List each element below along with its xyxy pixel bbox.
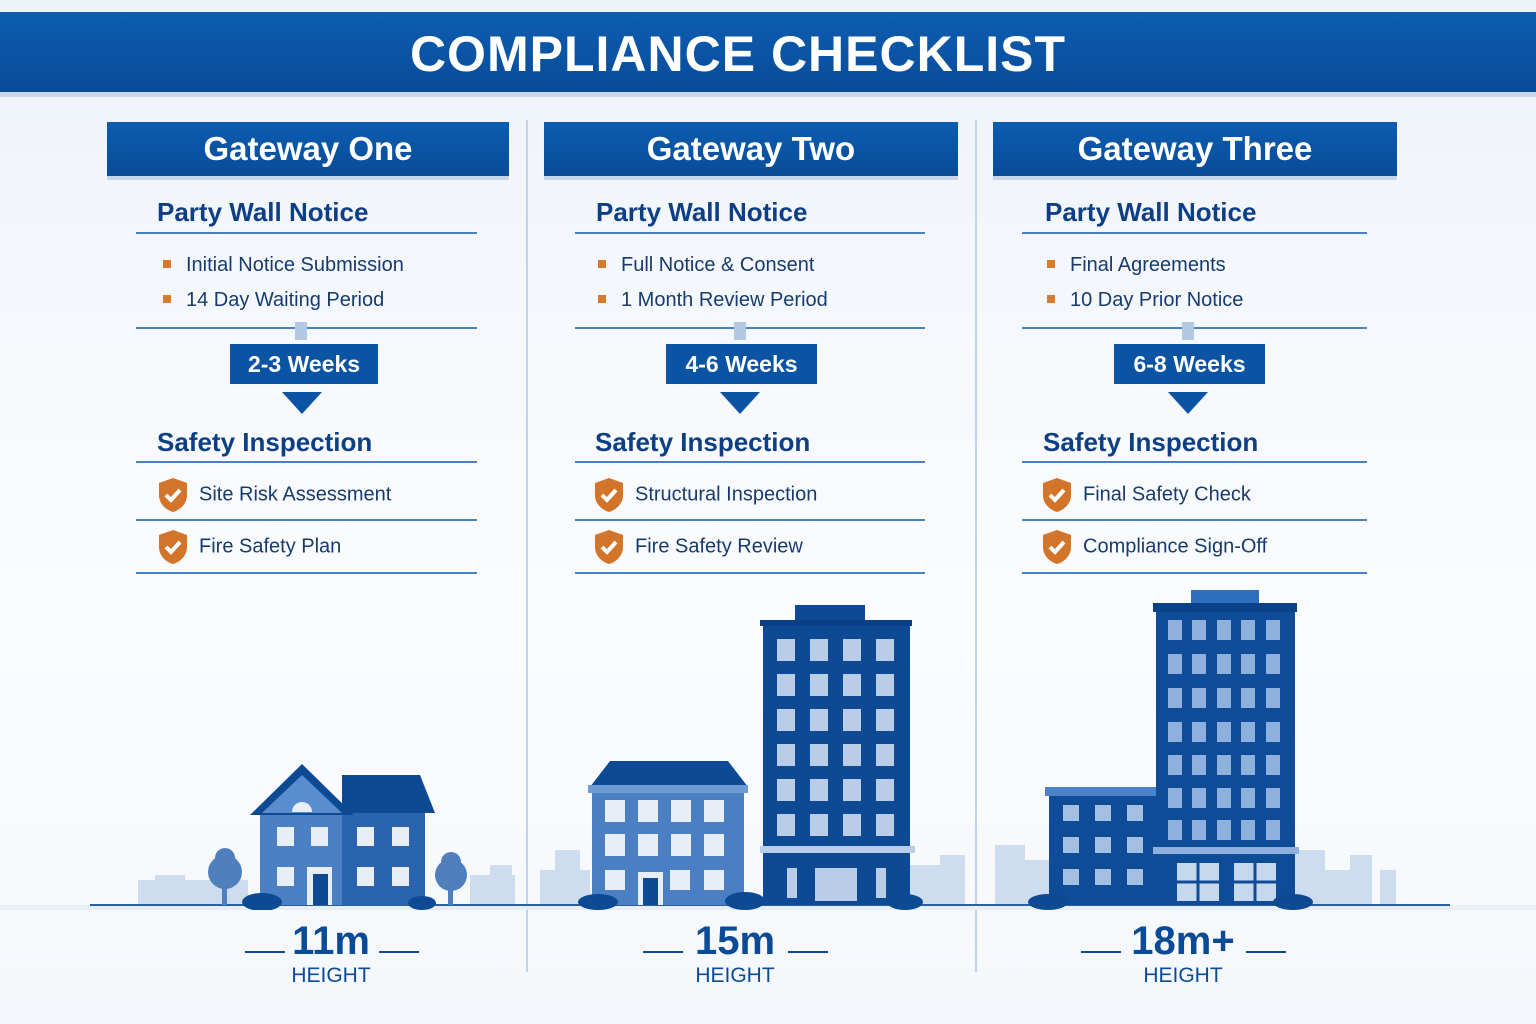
check items: Structural Inspection — [635, 483, 817, 505]
bullet list: Final Agreements — [1070, 254, 1226, 276]
label: 15m height — [643, 919, 828, 987]
label: 11m height — [245, 919, 419, 987]
label: 15m height: HEIGHT — [695, 964, 775, 987]
bullet list: 10 Day Prior Notice — [1070, 289, 1243, 311]
label: 11m height: 11m — [292, 919, 370, 963]
bullet list: 1 Month Review Period — [621, 289, 828, 311]
heading: gateway one — [107, 122, 509, 176]
title bar: COMPLIANCE CHECKLIST — [410, 26, 1066, 82]
panel: gateway two — [544, 122, 958, 574]
label: 18m+ height: HEIGHT — [1143, 964, 1223, 987]
label: 18m+ height — [1081, 919, 1286, 987]
heading: gateway two — [544, 122, 958, 176]
duration: 6-8 weeks — [1114, 344, 1265, 384]
background skyline — [138, 845, 1396, 905]
panel: gateway three — [993, 122, 1397, 574]
check items — [595, 478, 817, 512]
duration: 4-6 weeks: 4-6 Weeks — [685, 351, 798, 377]
label: 11m height: HEIGHT — [291, 964, 371, 987]
heading: gateway three: Gateway Three — [1078, 130, 1312, 167]
arrow — [720, 392, 760, 414]
panel: gateway two: Fire Safety Review — [635, 535, 803, 557]
heading: party wall notice: Party Wall Notice — [1045, 197, 1256, 227]
check items: Final Safety Check — [1083, 483, 1251, 505]
title bar — [0, 12, 1536, 92]
bullet list: 14 Day Waiting Period — [186, 289, 384, 311]
icon: high-rise — [1028, 590, 1313, 910]
check items — [1043, 478, 1251, 512]
icon: house — [208, 764, 467, 911]
panel: gateway three: Compliance Sign-Off — [1083, 535, 1267, 557]
duration: 6-8 weeks: 6-8 Weeks — [1133, 351, 1246, 377]
duration: 2-3 weeks — [230, 344, 378, 384]
heading: safety inspection: Safety Inspection — [157, 427, 372, 457]
arrow — [1168, 392, 1208, 414]
heading: gateway three — [993, 122, 1397, 176]
check items — [159, 478, 392, 512]
bullet list — [163, 254, 404, 311]
check items: Site Risk Assessment — [199, 483, 391, 505]
label: 18m+ height: 18m+ — [1131, 919, 1235, 963]
heading: party wall notice: Party Wall Notice — [157, 197, 368, 227]
bullet list: Full Notice & Consent — [621, 254, 814, 276]
heading: gateway one: Gateway One — [203, 130, 413, 167]
panel: gateway one — [107, 122, 509, 574]
heading: gateway two: Gateway Two — [647, 130, 855, 167]
duration: 4-6 weeks — [666, 344, 817, 384]
label: 15m height: 15m — [695, 919, 775, 963]
bullet list: Initial Notice Submission — [186, 254, 404, 276]
heading: party wall notice: Party Wall Notice — [596, 197, 807, 227]
heading: safety inspection: Safety Inspection — [595, 427, 810, 457]
bullet list — [598, 254, 828, 311]
panel: gateway one: Fire Safety Plan — [199, 535, 341, 557]
illustration: buildings — [0, 590, 1536, 910]
heading: safety inspection: Safety Inspection — [1043, 427, 1258, 457]
arrow — [282, 392, 322, 414]
icon: mid-rise and tower — [578, 605, 923, 910]
ground band — [0, 905, 1536, 910]
bullet list — [1047, 254, 1243, 311]
duration: 2-3 weeks: 2-3 Weeks — [248, 351, 360, 377]
